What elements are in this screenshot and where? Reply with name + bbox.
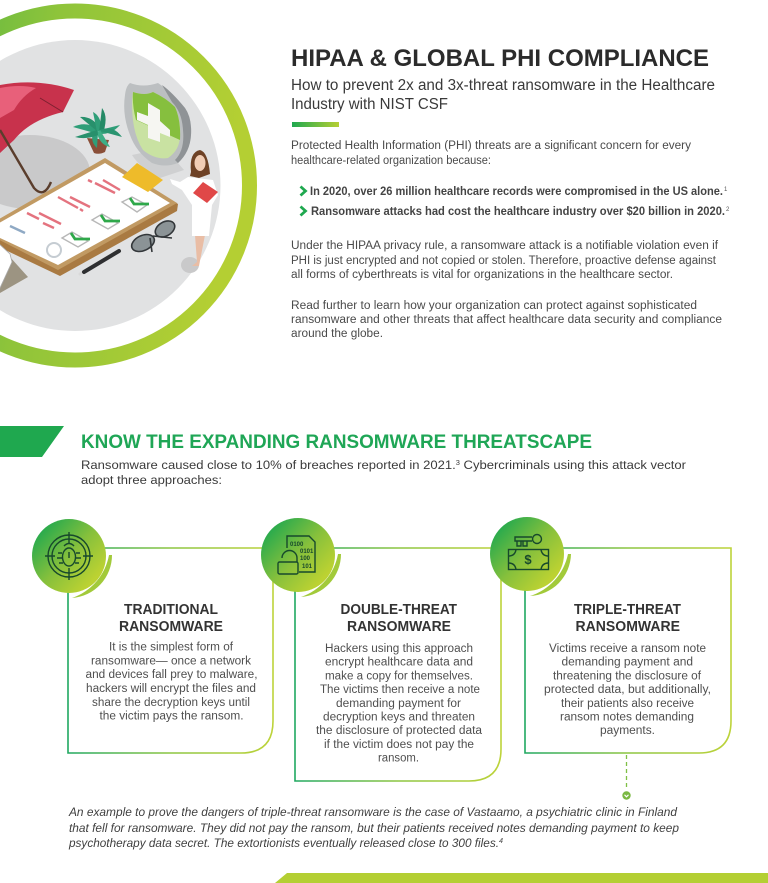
icon: locked binary data: 100 — [300, 556, 311, 562]
bullet 2: 2 — [726, 207, 730, 213]
card text: payments. — [600, 725, 655, 737]
grey disk — [0, 40, 220, 331]
card text: hackers will encrypt the files and — [86, 683, 256, 695]
card text: threatening the disclosure of — [553, 670, 702, 682]
card title: RANSOMWARE — [119, 619, 223, 635]
card text: and devices fall prey to malware, — [86, 669, 258, 681]
card text: ransom notes demanding — [560, 712, 694, 724]
section intro — [81, 458, 686, 487]
card text — [86, 642, 258, 722]
example callout: psychotherapy data secret. The extortionists eventually released close to 300 files. — [69, 838, 489, 850]
clip — [122, 163, 163, 192]
card: traditional ransomware — [32, 519, 273, 753]
HIPAA paragraph: all forms of cyberthreats is vital for organizations in the healthcare sector. — [291, 269, 673, 281]
card title: RANSOMWARE — [347, 619, 451, 635]
card text: the victim pays the ransom. — [100, 710, 244, 722]
example callout — [68, 807, 680, 850]
HIPAA paragraph — [291, 240, 719, 281]
card: double-threat ransomware — [261, 518, 501, 781]
card title — [340, 602, 457, 635]
doctor figure — [170, 150, 218, 273]
bullet list — [300, 186, 730, 218]
green ring — [0, 11, 250, 360]
card text: encrypt healthcare data and — [325, 656, 473, 668]
connector: dashed line with check marker — [622, 755, 631, 800]
icon: locked binary data: 0101 — [300, 549, 314, 555]
clipboard — [0, 158, 178, 276]
glasses — [129, 218, 178, 255]
card text: Hackers using this approach — [325, 643, 473, 655]
bullet 1: In 2020, over 26 million healthcare records were compromised in the US alone. — [310, 186, 723, 198]
intro paragraph — [291, 140, 691, 167]
card text: make a copy for themselves. — [325, 670, 473, 682]
card text: ransom. — [378, 752, 419, 764]
intro paragraph: Protected Health Information (PHI) threats are a significant concern for every — [291, 140, 691, 152]
read further paragraph: Read further to learn how your organization can protect against sophisticated — [291, 300, 697, 312]
icon: locked binary data: 101 — [302, 564, 313, 570]
shield — [124, 83, 191, 178]
card text: Victims receive a ransom note — [549, 643, 706, 655]
icon: key and banknote: $ — [524, 552, 532, 567]
title: HIPAA & GLOBAL PHI COMPLIANCE — [291, 45, 709, 72]
bullet 1: 1 — [724, 187, 728, 193]
card text — [316, 643, 483, 764]
card title: TRIPLE-THREAT — [574, 602, 681, 618]
icon: key and banknote — [490, 517, 571, 596]
calendar — [0, 240, 28, 293]
section heading: KNOW THE EXPANDING RANSOMWARE THREATSCAPE — [81, 432, 592, 453]
card text: protected data, but additionally, — [544, 684, 711, 696]
card text: It is the simplest form of — [109, 642, 234, 654]
card text: share the decryption keys until — [92, 697, 250, 709]
card title: DOUBLE-THREAT — [340, 602, 457, 618]
icon: locked binary data: 0100 — [290, 542, 304, 548]
card outline — [525, 548, 731, 753]
icon: bug in target — [32, 519, 112, 598]
pen — [80, 251, 119, 274]
plant — [73, 108, 122, 154]
subtitle: How to prevent 2x and 3x-threat ransomware in the Healthcare — [291, 77, 715, 94]
accent bar — [292, 122, 339, 127]
card text: demanding payment for — [336, 698, 461, 710]
card title — [119, 602, 223, 635]
read further paragraph: around the globe. — [291, 328, 383, 340]
card outline — [68, 548, 273, 753]
card title: RANSOMWARE — [576, 619, 680, 635]
example callout: 4 — [499, 838, 503, 845]
check boxes — [62, 197, 147, 247]
card text: ransomware— once a network — [91, 656, 251, 668]
card text: if the victim does not pay the — [324, 739, 474, 751]
section marker — [0, 426, 64, 457]
umbrella — [0, 82, 74, 192]
intro paragraph: healthcare-related organization because: — [291, 155, 491, 167]
read further paragraph: ransomware and other threats that affect healthcare data security and compliance — [291, 314, 722, 326]
card text: decryption keys and threaten — [323, 712, 475, 724]
umbrella shadow — [0, 135, 90, 209]
section intro: Cybercriminals using this attack vector — [460, 458, 686, 472]
subtitle: Industry with NIST CSF — [291, 96, 448, 113]
card: triple-threat ransomware — [490, 517, 731, 753]
example callout: An example to prove the dangers of triple-threat ransomware is the case of Vastaamo, a psychiatric clinic in Finland — [68, 807, 678, 819]
subtitle — [291, 77, 715, 113]
read further paragraph — [291, 300, 722, 340]
illustration: compliance checklist in ring — [0, 11, 250, 360]
card text — [544, 643, 711, 737]
icon: locked binary data — [261, 518, 341, 597]
section intro: Ransomware caused close to 10% of breaches reported in 2021. — [81, 458, 431, 472]
card text: the disclosure of protected data — [316, 725, 483, 737]
card title: TRADITIONAL — [124, 602, 218, 618]
card outline — [295, 548, 501, 781]
HIPAA paragraph: PHI is just encrypted and not copied or stolen. Therefore, proactive defense against — [291, 255, 717, 267]
footer band — [275, 873, 768, 883]
card title — [574, 602, 681, 635]
section intro: 3 — [456, 460, 460, 467]
section intro: adopt three approaches: — [81, 473, 222, 487]
card text: demanding payment and — [562, 656, 693, 668]
example callout: that fell for ransomware. They did not pay the ransom, but their patients received notes demanding payment to keep — [69, 823, 680, 835]
bullet 2: Ransomware attacks had cost the healthcare industry over $20 billion in 2020. — [311, 206, 725, 218]
card text: The victims then receive a note — [320, 684, 480, 696]
card text: their patients also receive — [561, 698, 694, 710]
HIPAA paragraph: Under the HIPAA privacy rule, a ransomware attack is a notifiable violation even if — [291, 240, 719, 252]
checklist dashes — [27, 180, 120, 228]
